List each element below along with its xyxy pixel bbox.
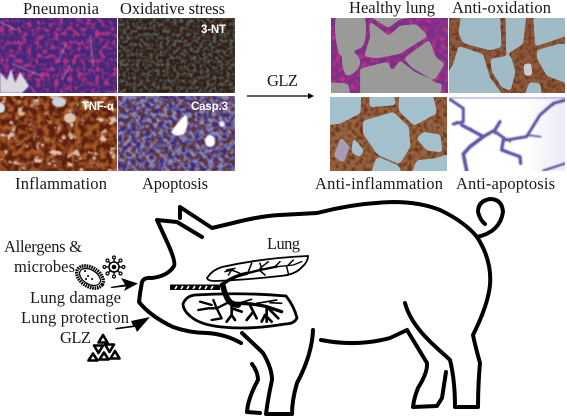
micrograph: oxidative stress 3-NT — [118, 18, 235, 93]
lower lung lobe — [183, 294, 297, 328]
head, ear, back and hind leg — [139, 220, 241, 343]
tail — [477, 199, 503, 237]
micrograph: inflammation TNF-alpha — [0, 96, 117, 171]
arrow: GLZ treatment — [247, 71, 314, 99]
icon: virus — [103, 256, 125, 278]
caption: Inflammation: Inflammation — [15, 174, 107, 193]
text: Allergens and microbes — [4, 237, 82, 276]
caption: Anti-apoptosis: Anti-apoptosis — [456, 174, 555, 193]
micrograph: apoptosis Casp-3 — [118, 96, 235, 171]
text: GLZ: GLZ — [60, 328, 91, 347]
arrow: GLZ entering snout — [115, 317, 150, 332]
text: Allergens and microbes: microbes — [14, 257, 75, 276]
micrograph: healthy lung — [331, 18, 448, 93]
text: Lung damage: Lung damage — [30, 288, 121, 307]
icon: GLZ triangles — [88, 335, 120, 360]
icon: bacterium — [73, 261, 107, 293]
bronchial tree — [198, 260, 302, 322]
caption: Apoptosis: Apoptosis — [142, 174, 208, 193]
belly — [321, 330, 407, 343]
label: Casp.3: Casp.3 — [191, 101, 228, 113]
label: Lung: Lung — [267, 234, 300, 253]
micrograph: anti-inflammation — [330, 97, 447, 171]
label: 3-NT: 3-NT — [201, 24, 226, 36]
pig outline — [139, 199, 503, 414]
micrograph: anti-oxidation — [449, 18, 565, 93]
lung diagram — [170, 234, 308, 328]
front leg far — [247, 364, 260, 413]
text: Allergens and microbes: Allergens & — [4, 237, 82, 256]
label: TNF-alpha: TNF-α — [82, 101, 114, 113]
caption: Anti-inflammation: Anti-inflammation — [315, 174, 443, 193]
front leg near — [242, 330, 313, 414]
text: Lung protection: Lung protection — [21, 308, 129, 327]
micrograph: anti-apoptosis — [449, 97, 566, 171]
label: GLZ: GLZ — [267, 71, 298, 90]
trachea — [170, 284, 220, 290]
upper lung lobe — [207, 256, 308, 281]
arrow: allergens entering snout — [110, 278, 138, 291]
far hind leg — [407, 330, 446, 407]
micrograph: pneumonia tissue — [0, 18, 117, 93]
